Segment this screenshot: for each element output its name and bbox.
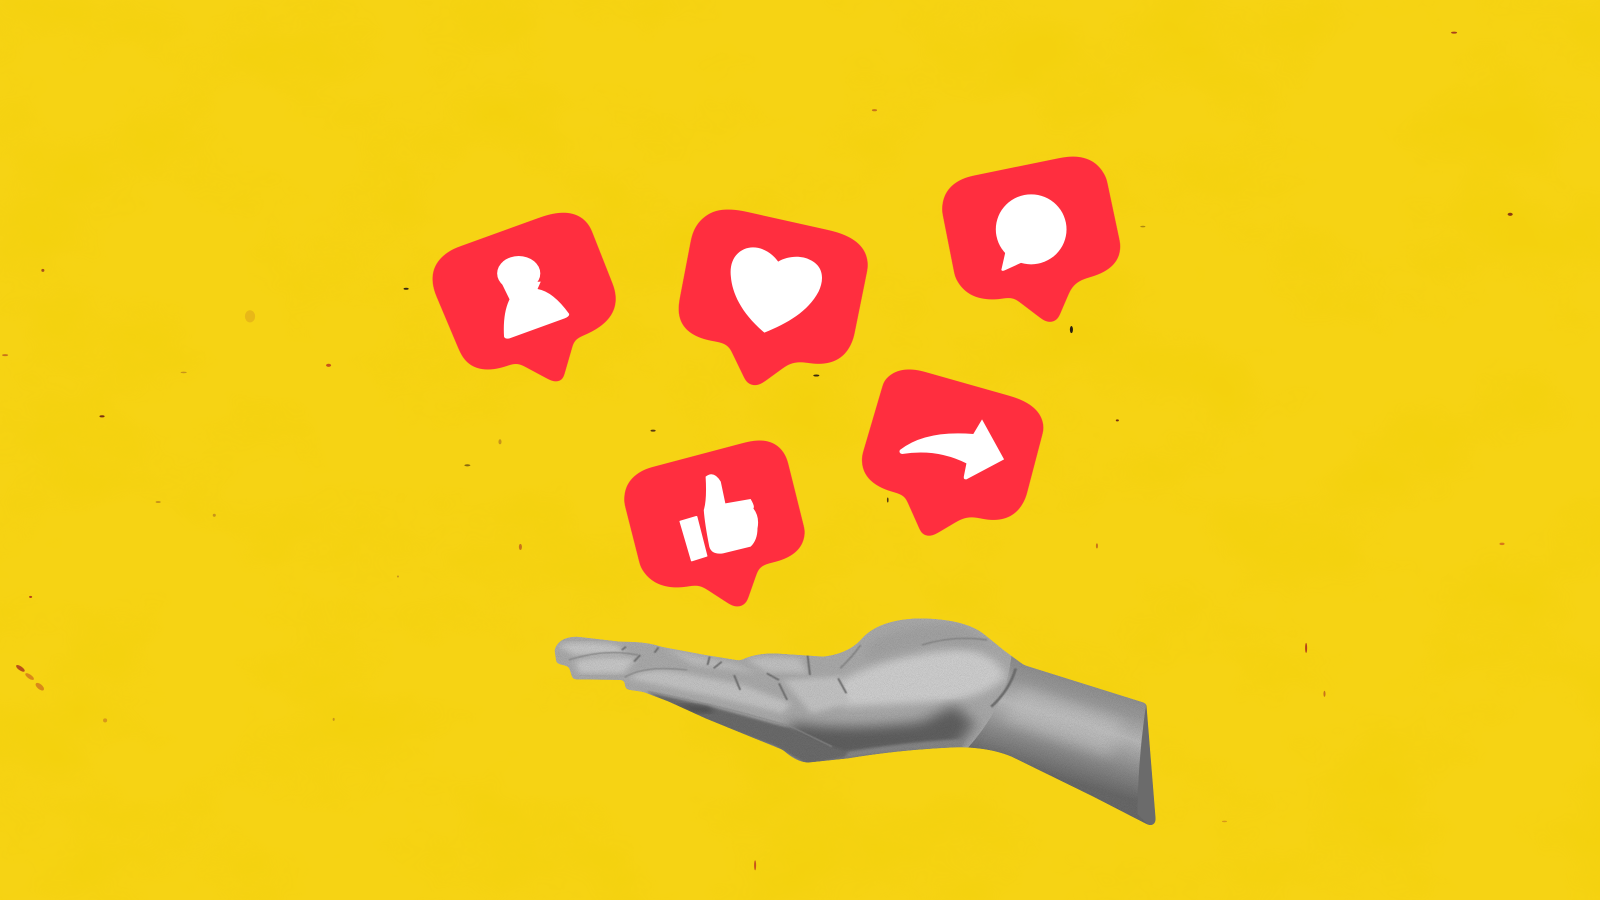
bubble: like (624, 440, 805, 607)
skin grain texture (555, 618, 1146, 822)
bubble: followers (432, 212, 616, 382)
wrist crease (991, 668, 1016, 707)
palm highlights (836, 650, 1006, 707)
thenar creases (840, 638, 987, 668)
bubble: comment (942, 156, 1120, 323)
bubble: heart (679, 209, 868, 386)
bubble: share (862, 369, 1044, 537)
forearm shading (968, 656, 1148, 824)
arm cut face (1138, 705, 1156, 825)
finger creases (622, 647, 846, 700)
finger separators (569, 653, 687, 677)
fold highlight on the lower palm edge (648, 692, 832, 747)
icon group: notification bubbles (432, 156, 1120, 607)
palm lower shadow (783, 705, 975, 763)
hand: open palm in greyscale (554, 618, 1156, 825)
